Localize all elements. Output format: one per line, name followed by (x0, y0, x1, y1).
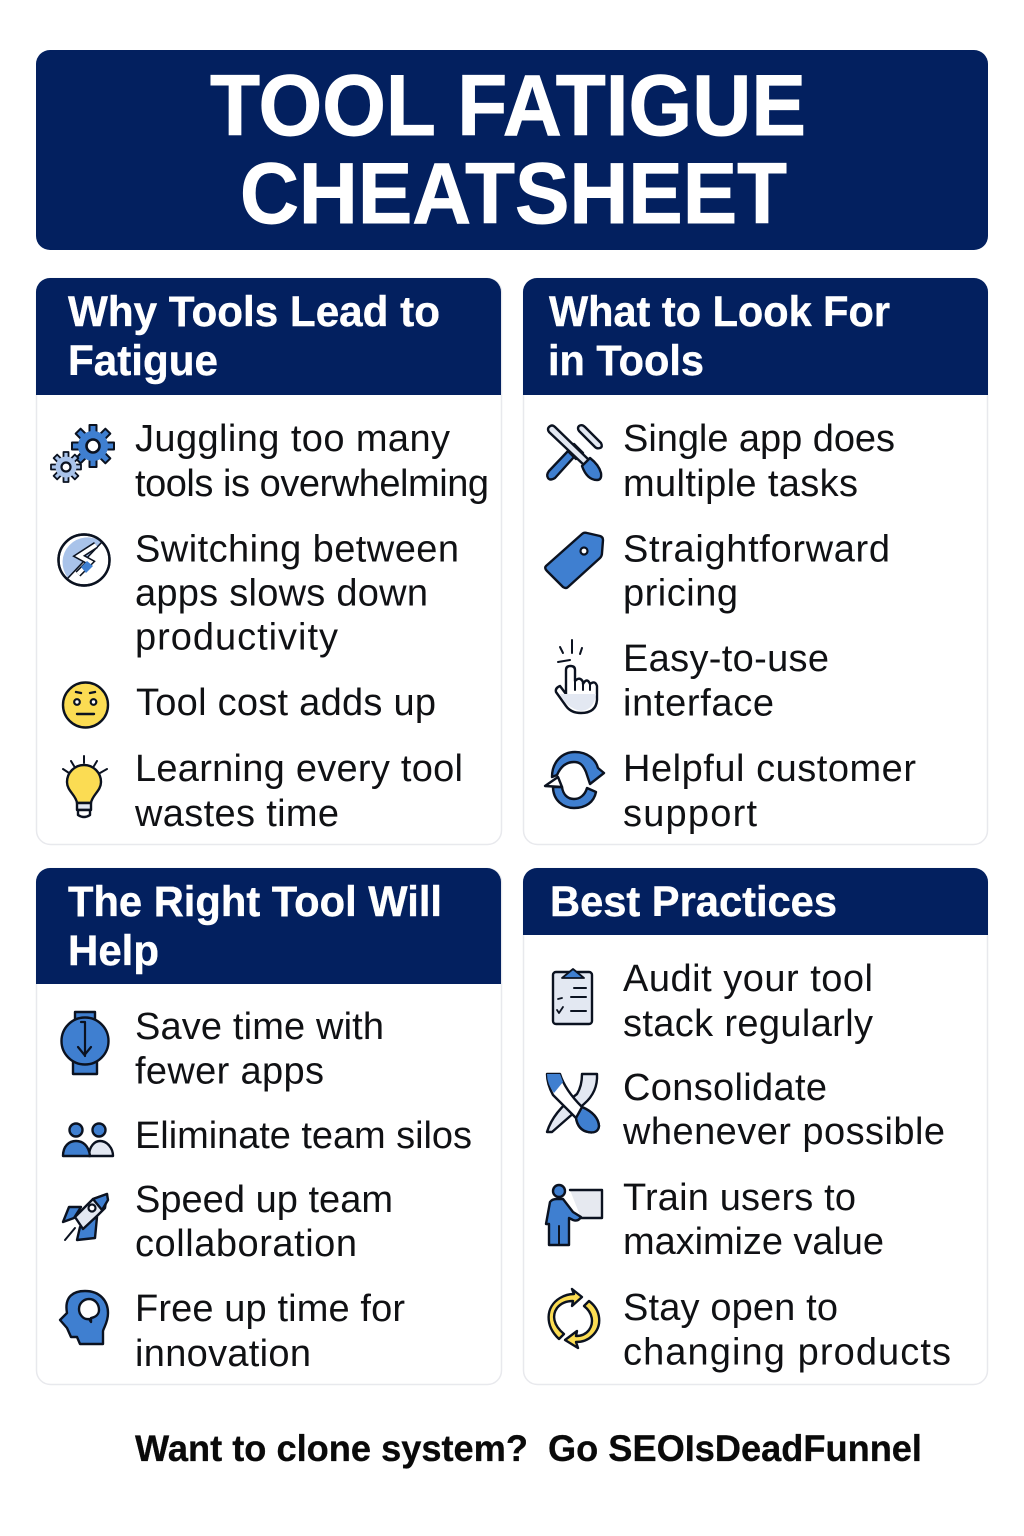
text: consolidate: whenever possible (622, 1111, 945, 1153)
icon: audit checklist (553, 969, 592, 1024)
heading: the right tool will help: The Right Tool Will (68, 878, 442, 926)
text: save time: Save time with (135, 1006, 384, 1048)
panel: why tools lead to fatigue (36, 278, 502, 844)
heading: what to look for in tools: in Tools (548, 337, 704, 385)
panel: best practices (523, 868, 988, 1384)
text: juggling too many tools: tools is overwhelming (135, 463, 489, 505)
text: consolidate: Consolidate (623, 1067, 827, 1109)
text: speed up team collaboration: collaboration (135, 1223, 357, 1265)
icon: head with idea (60, 1291, 108, 1344)
text: juggling too many tools: Juggling too many (135, 418, 450, 460)
text: train users: Train users to (623, 1177, 856, 1219)
text: single app: multiple tasks (623, 463, 858, 505)
text: audit your tool: Audit your tool (623, 958, 873, 1000)
text: helpful customer support: support (623, 793, 757, 835)
icon: neutral face (63, 682, 108, 728)
title banner (36, 50, 988, 250)
panel: the right tool will help (36, 868, 502, 1384)
text: save time (135, 1006, 384, 1092)
text: learning every tool: wastes time (134, 793, 339, 835)
text: easy to use: interface (623, 682, 774, 724)
text: audit your tool (623, 958, 873, 1045)
text: speed up team collaboration: Speed up team (135, 1179, 393, 1221)
text: easy to use (623, 638, 829, 724)
heading: why tools lead to fatigue (68, 288, 440, 385)
footer call to action (135, 1428, 922, 1469)
text: learning every tool (134, 748, 463, 835)
icon: rocket (63, 1194, 108, 1240)
text: free up time: innovation (135, 1333, 311, 1375)
text: stay open (623, 1287, 951, 1374)
heading: the right tool will help: Help (68, 927, 159, 975)
text: tool cost adds up: Tool cost adds up (136, 682, 436, 724)
icon: tapping hand (556, 640, 597, 713)
text: straightforward pricing: pricing (623, 572, 738, 614)
heading: why tools lead to fatigue: Fatigue (68, 337, 218, 385)
text: straightforward pricing: Straightforward (623, 528, 890, 570)
text: easy to use: Easy-to-use (623, 638, 829, 680)
text: switching between apps: productivity (135, 616, 338, 658)
text: switching between apps: Switching between (135, 528, 459, 570)
text: save time: fewer apps (135, 1050, 324, 1092)
footer call to action: Want to clone system? (135, 1428, 528, 1469)
text: free up time (135, 1288, 405, 1375)
heading: the right tool will help (68, 878, 442, 975)
text: train users (623, 1177, 884, 1263)
icon: watch with down arrow (62, 1012, 108, 1074)
text: helpful customer support: Helpful customer (623, 748, 916, 790)
text: stay open: changing products (623, 1332, 951, 1374)
icon: refresh support arrows (545, 752, 604, 808)
text: audit your tool: stack regularly (623, 1003, 873, 1045)
icon: crossed tools (547, 425, 602, 480)
text: straightforward pricing (623, 528, 890, 614)
heading: why tools lead to fatigue: Why Tools Lead to (68, 288, 440, 336)
title banner: TOOL FATIGUE (210, 58, 806, 154)
text: stay open: Stay open to (623, 1287, 838, 1329)
text: single app: Single app does (623, 418, 895, 460)
text: switching between apps: apps slows down (135, 572, 428, 614)
text: single app (623, 418, 895, 505)
text: juggling too many tools (135, 418, 489, 505)
text: helpful customer support (623, 748, 916, 835)
footer call to action: Go SEOIsDeadFunnel (548, 1428, 922, 1469)
icon: consolidate crossed shapes (547, 1074, 599, 1132)
text: free up time: Free up time for (135, 1288, 405, 1330)
icon: trainer and board (546, 1185, 602, 1245)
text: switching between apps (135, 528, 459, 658)
text: learning every tool: Learning every tool (135, 748, 463, 790)
icon: price tag (545, 533, 603, 588)
icon: light bulb (63, 756, 107, 817)
panel: what to look for in tools (523, 278, 988, 844)
text: speed up team collaboration (135, 1179, 393, 1265)
heading: what to look for in tools: What to Look For (549, 288, 890, 336)
text: train users: maximize value (623, 1221, 884, 1263)
title banner: CHEATSHEET (240, 146, 787, 242)
heading: best practices: Best Practices (550, 878, 837, 926)
icon: yellow cycle arrows (549, 1289, 599, 1348)
heading: what to look for in tools (548, 288, 890, 385)
text: consolidate (622, 1067, 945, 1153)
icon: gears (51, 425, 114, 482)
text: eliminate team silos: Eliminate team silos (135, 1115, 472, 1157)
icon: team people (63, 1124, 113, 1156)
icon: switching arrows circle (58, 534, 110, 586)
